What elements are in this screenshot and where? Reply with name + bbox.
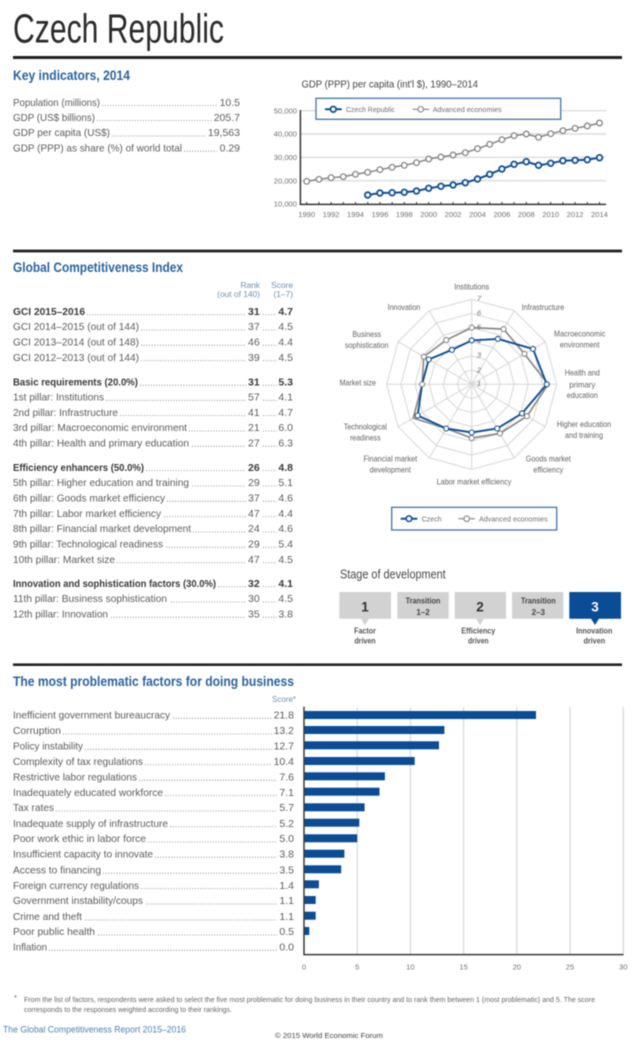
factor rows: Policy instability — [13, 740, 84, 752]
row: 6.3 — [278, 438, 293, 450]
row: GDP: GDP (US$ billions) — [13, 112, 95, 124]
row: 11th pillar: Business sophistication — [13, 593, 167, 605]
x axis labels: 2006 — [493, 210, 510, 219]
score header: Score* — [272, 694, 297, 704]
radar scale numbers: 2 — [476, 366, 482, 375]
radar axis labels: and training — [565, 430, 603, 440]
stage 1 — [339, 592, 391, 646]
panel: most problematic factors — [13, 673, 627, 972]
report name: The Global Competitiveness Report 2015–2016 — [3, 1025, 186, 1035]
row: innovation factors: 32 — [248, 578, 260, 590]
column headers: (1–7) — [273, 289, 293, 299]
radar axis labels: environment — [560, 339, 600, 349]
factor rows: Tax rates — [13, 802, 54, 814]
row — [13, 508, 293, 520]
factor rows: Restrictive labor regulations — [13, 772, 137, 784]
row — [13, 608, 293, 620]
row — [13, 392, 293, 404]
radar scale numbers: 1 — [477, 379, 481, 388]
row — [13, 306, 293, 318]
factor rows: Foreign currency regulations — [13, 880, 139, 892]
row: 39 — [248, 352, 260, 364]
stage 3 active: Innovation — [576, 626, 613, 636]
factor rows: Inadequate supply of infrastructure — [13, 818, 168, 830]
footnote: From the list of factors, respondents were asked to select the five most problematic for doing business in their country and to rank them between 1 (most problematic) and 5. The score — [24, 995, 595, 1004]
panel: key indicators — [13, 67, 240, 154]
factor rows: Complexity of tax regulations — [13, 756, 143, 768]
row: 6th pillar: Goods market efficiency — [13, 492, 166, 504]
transition 1-2: Transition — [406, 596, 440, 606]
x axis labels: 1994 — [347, 210, 364, 219]
transition 2-3: Transition — [521, 596, 556, 606]
transition 2-3 — [512, 592, 563, 619]
stage 1: Factor — [354, 626, 376, 636]
factor rows: 1.4 — [279, 880, 294, 892]
radar series: advanced economies — [413, 328, 548, 438]
row: 6.0 — [278, 422, 293, 434]
column headers: Score — [271, 280, 293, 290]
row: GDP share: 0.29 — [220, 142, 240, 154]
factor rows: 7.1 — [279, 787, 294, 799]
radar axis labels: Institutions — [454, 282, 489, 292]
factor rows: Insufficient capacity to innovate — [13, 848, 153, 860]
row: 3rd pillar: Macroeconomic environment — [13, 422, 187, 434]
row — [13, 593, 293, 605]
row — [13, 538, 293, 550]
row: 24 — [248, 523, 260, 535]
row — [13, 321, 293, 333]
x axis labels — [298, 210, 608, 219]
y axis labels: 30,000 — [274, 153, 297, 162]
row: GDP per capita — [13, 127, 240, 139]
row: GDP per capita: 19,563 — [208, 127, 240, 139]
row: 57 — [248, 392, 260, 404]
radar axis labels — [340, 282, 611, 487]
x axis labels: 1998 — [396, 210, 413, 219]
line chart: GDP per capita — [274, 78, 608, 219]
chart legend: Advanced economies — [433, 105, 502, 114]
radar legend: Advanced economies — [479, 514, 548, 523]
radar axis labels: Technological — [344, 422, 387, 432]
row: population: 10.5 — [220, 97, 240, 109]
row: population: Population (millions) — [13, 97, 100, 109]
row: 5.1 — [278, 477, 293, 489]
factor rows: 3.8 — [279, 848, 294, 860]
radar axis labels: Infrastructure — [522, 302, 565, 312]
radar axis labels: Labor market efficiency — [437, 477, 512, 487]
x axis labels: 2012 — [567, 210, 584, 219]
factor rows: 21.8 — [274, 710, 294, 722]
row: 46 — [248, 336, 260, 348]
transition 1-2 — [397, 592, 449, 619]
x axis labels: 2008 — [518, 210, 535, 219]
radar scale numbers — [476, 294, 482, 388]
chart legend — [316, 98, 561, 119]
factor rows: Poor public health — [13, 926, 95, 938]
row: 27 — [248, 438, 260, 450]
row: 4.5 — [278, 593, 293, 605]
row: 1st pillar: Institutions — [13, 392, 104, 404]
row: 4.5 — [278, 352, 293, 364]
factor rows: 1.1 — [279, 911, 294, 923]
x axis labels: 2004 — [469, 210, 486, 219]
x axis labels: 15 — [459, 962, 468, 972]
row: basic requirements — [13, 376, 293, 388]
row: 21 — [248, 422, 260, 434]
y axis labels: 40,000 — [274, 130, 297, 139]
column headers: (out of 140) — [217, 289, 260, 299]
x axis labels: 1996 — [371, 210, 388, 219]
stage 1: driven — [354, 636, 376, 646]
factor rows: Inefficient government bureaucracy — [13, 710, 171, 722]
radar scale numbers: 6 — [477, 308, 482, 317]
factor rows: 0.0 — [279, 942, 294, 954]
x axis labels: 10 — [406, 962, 415, 972]
panel: global competitiveness index table — [13, 259, 293, 620]
stage 2: driven — [468, 636, 489, 646]
x axis labels: 2010 — [542, 210, 559, 219]
radar axis labels: Higher education — [557, 419, 611, 429]
column headers — [217, 280, 293, 299]
radar axis labels: Goods market — [526, 454, 571, 464]
row: 37 — [248, 492, 260, 504]
radar scale numbers: 3 — [477, 351, 482, 360]
row: 4.5 — [278, 321, 293, 333]
row: 7th pillar: Labor market efficiency — [13, 508, 162, 520]
row: basic requirements: Basic requirements (20.0%) — [13, 376, 138, 388]
heading: problematic factors: The most problematic factors for doing business — [13, 673, 294, 689]
radar axis labels: Financial market — [363, 454, 418, 464]
row: population — [13, 97, 240, 109]
row: GDP per capita: GDP per capita (US$) — [13, 127, 110, 139]
heading: stage of development: Stage of development — [340, 568, 446, 582]
row: 9th pillar: Technological readiness — [13, 538, 163, 550]
row: 2nd pillar: Infrastructure — [13, 407, 118, 419]
radar scale numbers: 5 — [477, 322, 482, 331]
row — [13, 477, 293, 489]
radar chart — [340, 282, 611, 530]
factor rows: Inadequately educated workforce — [13, 787, 163, 799]
row: 30 — [248, 593, 260, 605]
row: GCI 2015–2016 — [13, 306, 85, 318]
factor rows: 0.5 — [279, 926, 294, 938]
stage 3 active: 3 — [591, 600, 599, 614]
factor rows: 5.0 — [279, 833, 294, 845]
row: GCI 2014–2015 (out of 144) — [13, 321, 139, 333]
radar axis labels: Macroeconomic — [554, 329, 606, 339]
x axis labels: 5 — [355, 962, 359, 972]
radar axis labels: education — [567, 390, 598, 400]
row: 37 — [248, 321, 260, 333]
radar legend: Czech — [422, 514, 442, 523]
factor rows: 3.5 — [279, 864, 294, 876]
factor rows: Crime and theft — [13, 911, 82, 923]
row — [13, 336, 293, 348]
row — [13, 554, 293, 566]
panel: stage of development — [339, 568, 621, 646]
row: 10th pillar: Market size — [13, 554, 115, 566]
y axis labels: 50,000 — [274, 106, 297, 115]
row: 4th pillar: Health and primary education — [13, 438, 189, 450]
row: GCI 2013–2014 (out of 148) — [13, 336, 139, 348]
column headers: Rank — [240, 280, 261, 290]
row: 5.4 — [278, 538, 293, 550]
x axis labels: 2014 — [591, 210, 608, 219]
row: innovation factors: 4.1 — [278, 578, 293, 590]
row — [13, 492, 293, 504]
factor rows: 7.6 — [279, 772, 294, 784]
row: efficiency enhancers: 26 — [248, 462, 260, 474]
stage 3 active — [569, 592, 621, 646]
row: 4.5 — [278, 554, 293, 566]
x axis labels: 1992 — [323, 210, 340, 219]
row: 47 — [248, 554, 260, 566]
row: efficiency enhancers — [13, 462, 293, 474]
bars — [304, 711, 536, 935]
radar legend — [392, 507, 557, 530]
x axis labels: 30 — [619, 962, 627, 972]
radar axis labels: readiness — [350, 432, 381, 442]
row: 4.7 — [278, 306, 293, 318]
factor rows: 12.7 — [274, 740, 294, 752]
y axis labels: 20,000 — [274, 176, 297, 185]
footnote: * — [14, 993, 17, 1002]
row: 29 — [248, 538, 260, 550]
stage 1: 1 — [361, 600, 369, 614]
factor rows: Government instability/coups — [13, 895, 143, 907]
row: GDP: 205.7 — [214, 112, 240, 124]
row: basic requirements: 31 — [248, 376, 260, 388]
x axis labels: 25 — [566, 962, 574, 972]
bar chart — [302, 707, 627, 972]
footnote: corresponds to the responses weighted according to their rankings. — [24, 1005, 232, 1014]
row: 47 — [248, 508, 260, 520]
series: advanced economies — [307, 123, 600, 181]
radar scale numbers: 4 — [477, 336, 481, 345]
factor rows: Inflation — [13, 942, 47, 954]
factor rows: 10.4 — [274, 756, 294, 768]
row: 29 — [248, 477, 260, 489]
row — [13, 438, 293, 450]
transition 1-2: 1–2 — [416, 608, 430, 617]
x axis labels: 2000 — [420, 210, 437, 219]
row: 4.4 — [278, 508, 293, 520]
radar axis labels: efficiency — [533, 464, 564, 474]
row: efficiency enhancers: 4.8 — [278, 462, 293, 474]
radar scale numbers: 7 — [477, 294, 482, 303]
copyright: © 2015 World Economic Forum — [275, 1031, 383, 1040]
chart legend: Czech Republic — [346, 105, 395, 114]
row: 8th pillar: Financial market development — [13, 523, 191, 535]
factor rows: 5.7 — [279, 802, 294, 814]
row: 3.8 — [278, 608, 293, 620]
stage 3 active: driven — [583, 636, 605, 646]
stage 2: Efficiency — [461, 626, 496, 636]
row: 12th pillar: Innovation — [13, 608, 108, 620]
radar axis labels: primary — [569, 379, 596, 389]
heading: GCI: Global Competitiveness Index — [13, 259, 183, 275]
footnote — [14, 993, 595, 1014]
factor rows: Poor work ethic in labor force — [13, 833, 146, 845]
radar axis labels: Business — [352, 329, 381, 339]
x axis labels: 2002 — [445, 210, 462, 219]
x axis labels — [302, 962, 627, 972]
row: 4.4 — [278, 336, 293, 348]
row: 31 — [248, 306, 260, 318]
row: innovation factors: Innovation and sophistication factors (30.0%) — [13, 578, 216, 590]
x axis labels: 1990 — [298, 210, 315, 219]
transition 2-3: 2–3 — [532, 608, 546, 617]
y axis labels — [274, 106, 297, 209]
factor rows — [13, 710, 294, 954]
title: Czech Republic — [13, 6, 224, 52]
row: GDP — [13, 112, 240, 124]
series: Czech Republic — [368, 158, 600, 195]
row: 4.7 — [278, 407, 293, 419]
row — [13, 523, 293, 535]
radar axis labels: Health and — [565, 368, 600, 378]
radar axis labels: sophistication — [345, 340, 389, 350]
row — [13, 422, 293, 434]
row: GDP share: GDP (PPP) as share (%) of world total — [13, 142, 182, 154]
radar markers: advanced economies — [421, 325, 529, 441]
row: 35 — [248, 608, 260, 620]
row: efficiency enhancers: Efficiency enhancers (50.0%) — [13, 462, 144, 474]
factor rows: 1.1 — [279, 895, 294, 907]
row: GCI 2012–2013 (out of 144) — [13, 352, 139, 364]
factor rows: Access to financing — [13, 864, 101, 876]
stage 2: 2 — [476, 600, 484, 614]
x axis labels: 0 — [302, 962, 306, 972]
row — [13, 407, 293, 419]
y axis labels: 10,000 — [274, 200, 297, 209]
factor rows: Corruption — [13, 725, 61, 737]
radar axis labels: development — [370, 465, 411, 475]
row — [13, 352, 293, 364]
radar axis labels: Innovation — [388, 302, 421, 312]
row: 5th pillar: Higher education and training — [13, 477, 189, 489]
stage 2 — [455, 592, 506, 646]
row: 41 — [248, 407, 260, 419]
row: 4.6 — [278, 492, 293, 504]
factor rows: 5.2 — [279, 818, 294, 830]
chart title: GDP (PPP) per capita (int'l $), 1990–2014 — [302, 78, 478, 90]
row: basic requirements: 5.3 — [278, 376, 293, 388]
radar series: Czech — [418, 339, 547, 432]
row: 4.1 — [278, 392, 293, 404]
heading: key indicators: Key indicators, 2014 — [13, 67, 130, 83]
row: 4.6 — [278, 523, 293, 535]
radar axis labels: Market size — [340, 378, 376, 388]
radar markers: Czech — [415, 336, 549, 435]
factor rows: 13.2 — [274, 725, 294, 737]
x axis labels: 20 — [513, 962, 521, 972]
